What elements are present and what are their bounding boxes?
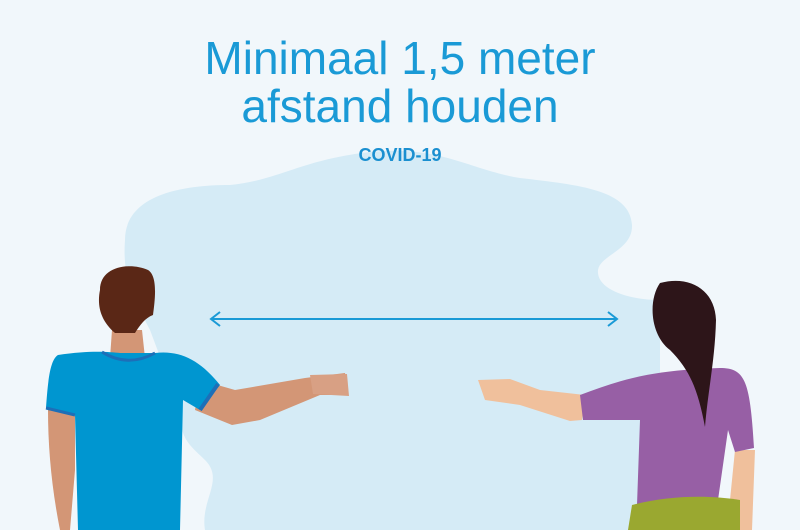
woman [478,281,755,530]
arrow: distance [211,312,617,326]
title [204,32,596,165]
background blob [125,151,660,530]
title: Minimaal 1,5 meter [204,32,596,84]
title: COVID-19 [358,145,442,165]
title: afstand houden [241,80,559,132]
man [46,266,349,530]
